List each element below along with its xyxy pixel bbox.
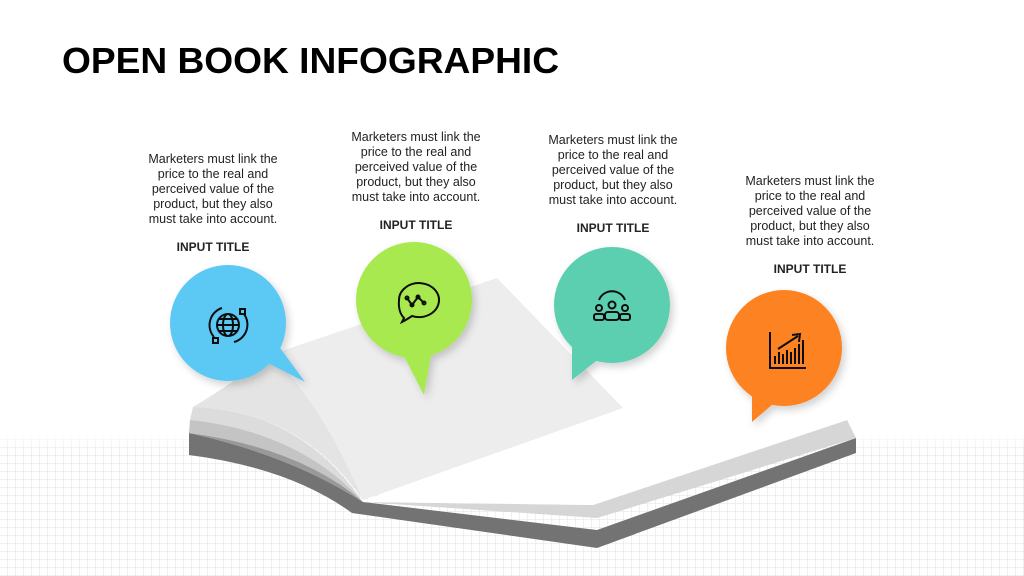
text block 3: Marketers must link the bbox=[548, 133, 678, 147]
text block 1: product, but they also bbox=[153, 197, 273, 211]
icon: team bbox=[594, 291, 630, 320]
text block 3 bbox=[548, 133, 678, 235]
text block 2: price to the real and bbox=[361, 145, 471, 159]
text block 4: price to the real and bbox=[755, 189, 865, 203]
text block 4: product, but they also bbox=[750, 219, 870, 233]
text block 3: product, but they also bbox=[553, 178, 673, 192]
text block 1: perceived value of the bbox=[152, 182, 274, 196]
text block 1: INPUT TITLE bbox=[177, 240, 249, 254]
text block 4 bbox=[745, 174, 875, 276]
open book bbox=[189, 278, 856, 548]
text block 1: must take into account. bbox=[149, 212, 277, 226]
bubble: teal bbox=[554, 247, 670, 380]
text block 4: INPUT TITLE bbox=[774, 262, 846, 276]
icon: chat bbox=[399, 283, 439, 322]
text block 4: perceived value of the bbox=[749, 204, 871, 218]
text block 2 bbox=[351, 130, 481, 232]
bubble: blue bbox=[170, 265, 305, 382]
text block 1: Marketers must link the bbox=[148, 152, 278, 166]
text block 2: INPUT TITLE bbox=[380, 218, 452, 232]
title: OPEN BOOK INFOGRAPHIC bbox=[62, 40, 559, 81]
text block 1: price to the real and bbox=[158, 167, 268, 181]
text block 4: Marketers must link the bbox=[745, 174, 875, 188]
text block 2: Marketers must link the bbox=[351, 130, 481, 144]
text block 4: must take into account. bbox=[746, 234, 874, 248]
text block 2: perceived value of the bbox=[355, 160, 477, 174]
text block 2: product, but they also bbox=[356, 175, 476, 189]
text block 3: price to the real and bbox=[558, 148, 668, 162]
text block 3: INPUT TITLE bbox=[577, 221, 649, 235]
icon: globe bbox=[210, 308, 247, 343]
text block 3: must take into account. bbox=[549, 193, 677, 207]
icon: chart bbox=[770, 332, 806, 368]
text block 2: must take into account. bbox=[352, 190, 480, 204]
bubble: green bbox=[356, 242, 472, 395]
bubble: orange bbox=[726, 290, 842, 422]
text block 3: perceived value of the bbox=[552, 163, 674, 177]
text block 1 bbox=[148, 152, 278, 254]
